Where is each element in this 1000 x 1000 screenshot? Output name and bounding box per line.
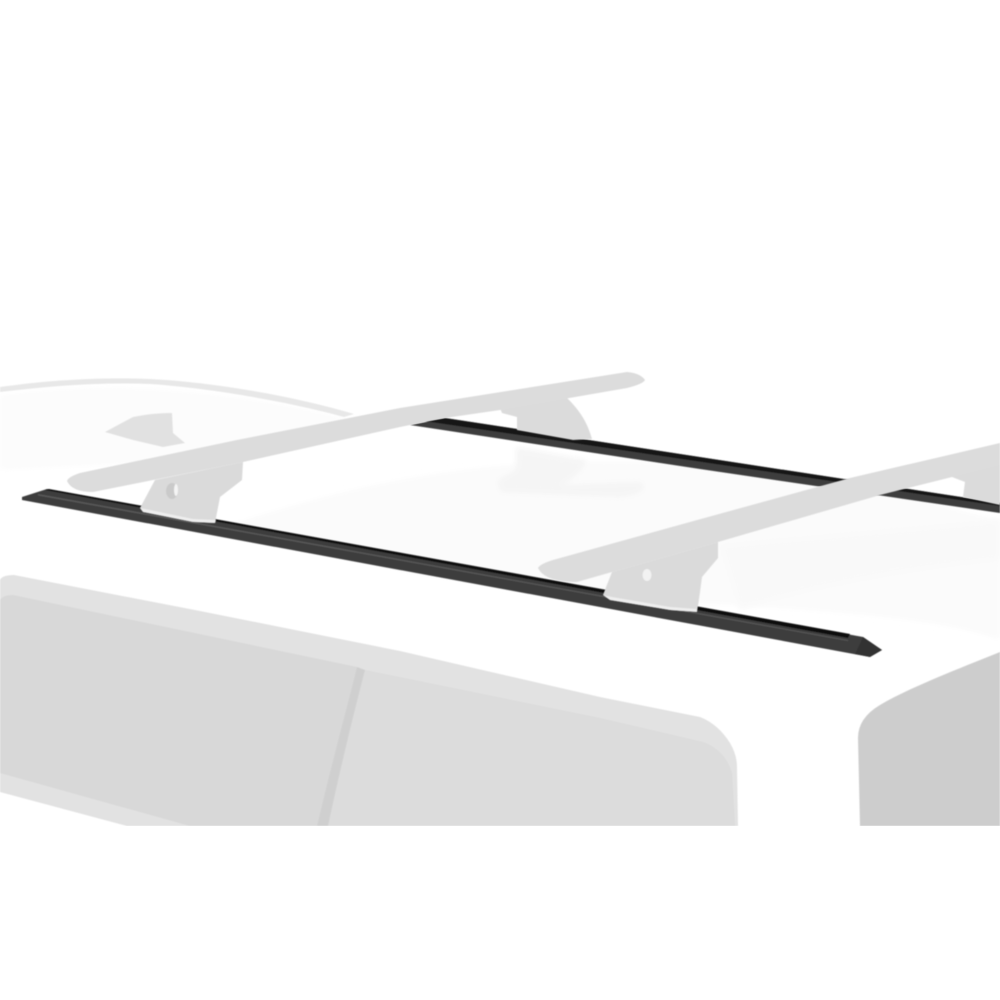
second crossbar — [538, 443, 1000, 582]
roof outline — [0, 378, 354, 417]
vehicle canopy body — [0, 378, 1000, 826]
middle foot — [603, 542, 718, 612]
window divider — [317, 667, 365, 826]
back rail — [410, 418, 1000, 513]
rear window right pane — [328, 670, 735, 826]
front foot — [140, 462, 243, 523]
back foot, second crossbar — [950, 455, 1000, 505]
side window — [858, 652, 1000, 826]
rack feet and crossbars — [67, 372, 1000, 612]
front rail — [22, 489, 882, 657]
first crossbar — [67, 372, 645, 492]
foot bolt — [642, 569, 652, 581]
illustration: roof rack on vehicle canopy — [0, 372, 1000, 826]
shark fin antenna — [105, 413, 185, 447]
roof surface shading — [500, 451, 640, 496]
rear window frame — [0, 575, 738, 826]
rear window left pane — [0, 595, 357, 826]
foot bolt — [166, 483, 178, 499]
back foot, first crossbar — [500, 396, 592, 440]
